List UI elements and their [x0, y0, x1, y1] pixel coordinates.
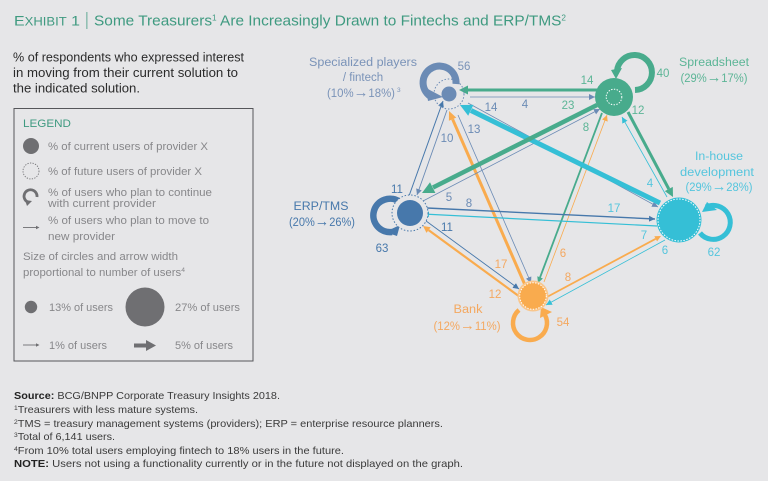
node: spreadsheet — [595, 55, 750, 116]
label: fintech: / fintech — [343, 72, 383, 84]
arrow: spreadsheet to fintech — [459, 75, 597, 94]
footnotes: Treasurers with less mature systems. — [18, 404, 198, 416]
legend: size note: proportional to number of users — [23, 267, 176, 279]
arrow: bank to fintech — [449, 111, 525, 285]
label: ERP/TMS: ERP/TMS — [294, 201, 349, 213]
arrow: in-house to ERP — [423, 203, 657, 226]
footnotes: 3 — [14, 432, 18, 439]
label: fintech: (10%→18%) — [327, 84, 395, 101]
node: ERP/TMS — [289, 195, 428, 255]
title: 2 — [561, 14, 567, 22]
label: fintech: 3 — [397, 87, 401, 94]
arrow: fintech to bank: 13 — [468, 124, 480, 136]
arrow: ERP to bank: 11 — [441, 222, 453, 234]
arrow: ERP to fintech: 11 — [391, 184, 403, 196]
panel: legend — [14, 108, 253, 361]
label: spreadsheet: (29%→17%) — [680, 69, 748, 86]
subtitle text: the indicated solution. — [13, 82, 140, 96]
title: EXHIBIT 1 — [14, 12, 80, 28]
footnotes: Source: BCG/BNPP Corporate Treasury Insights 2018. — [14, 390, 280, 402]
label: spreadsheet: Spreadsheet — [679, 57, 750, 69]
subtitle text: % of respondents who expressed interest — [13, 50, 245, 64]
arrow: fintech to spreadsheet: 4 — [522, 99, 529, 111]
legend: thick arrow: 5% of users — [175, 340, 233, 352]
footnotes: 1 — [14, 405, 18, 412]
arrow: in-house to bank: 7 — [641, 230, 647, 242]
arrow: in-house to bank: 6 — [662, 245, 668, 257]
arrow: bank to in-house — [547, 236, 661, 297]
legend: future users — [23, 163, 203, 179]
arrow: spreadsheet to bank: 8 — [583, 122, 589, 134]
arrow: spreadsheet to ERP: 23 — [562, 100, 574, 112]
arrow: spreadsheet to bank — [537, 113, 602, 283]
arrow: in-house to spreadsheet: 4 — [647, 178, 654, 190]
footnotes: 2 — [14, 419, 18, 426]
arrow: fintech to ERP: 10 — [441, 133, 453, 145]
node: bank: 54 — [557, 317, 570, 329]
subtitle text — [13, 50, 245, 96]
node: ERP/TMS: 63 — [376, 243, 388, 255]
legend: thick arrow — [134, 340, 233, 352]
footnotes: 4 — [14, 446, 18, 453]
node: specialized players / fintech — [309, 57, 470, 109]
label: in-house: In-house — [695, 151, 743, 163]
legend: size note: Size of circles and arrow width — [23, 251, 178, 263]
arrow: spreadsheet to fintech: 14 — [581, 75, 594, 87]
legend: move arrow: % of users who plan to move to — [48, 215, 209, 227]
label: ERP/TMS: (20%→26%) — [289, 213, 355, 230]
arrow: in-house to ERP: 17 — [608, 203, 620, 215]
title — [14, 12, 567, 30]
arrow: spreadsheet to in-house — [628, 105, 673, 197]
footnotes — [14, 390, 463, 470]
footnotes: TMS = treasury management systems (providers); ERP = enterprise resource planners. — [18, 418, 443, 430]
arrow: in-house to bank — [546, 230, 668, 305]
footnotes: Total of 6,141 users. — [18, 431, 115, 443]
label: fintech — [309, 57, 417, 101]
arrow: bank to in-house: 8 — [565, 272, 571, 284]
node: bank — [434, 280, 570, 340]
legend: continue loop: % of users who plan to continue — [48, 187, 212, 199]
label: in-house — [680, 151, 755, 195]
footnotes: From 10% total users employing fintech to 18% users in the future. — [18, 445, 344, 457]
arrow: bank to spreadsheet — [544, 115, 607, 282]
arrow: bank to ERP: 12 — [489, 289, 501, 301]
label: bank: Bank — [454, 304, 483, 316]
arrow: ERP to spreadsheet — [423, 109, 600, 204]
title: 1 — [212, 14, 217, 22]
label: ERP/TMS — [289, 201, 355, 230]
title: Some Treasurers — [94, 12, 209, 30]
label: in-house: (29%→28%) — [686, 178, 753, 195]
node: in-house development — [656, 151, 755, 259]
label: in-house: development — [680, 167, 755, 179]
legend: large circle — [126, 288, 241, 326]
legend: current users — [23, 138, 209, 154]
legend heading: LEGEND — [23, 118, 71, 130]
label: bank: (12%→11%) — [434, 317, 501, 334]
arrow: in-house to spreadsheet — [622, 117, 667, 197]
legend: small circle: 13% of users — [49, 302, 113, 314]
legend: size note: 4 — [181, 267, 185, 274]
arrow: bank to ERP — [423, 226, 520, 301]
legend: continue loop — [24, 187, 212, 210]
node: specialized players / fintech: 56 — [458, 61, 470, 73]
arrow: bank to fintech: 17 — [495, 259, 507, 271]
node: in-house development: 62 — [708, 247, 720, 259]
label: fintech: Specialized players — [309, 57, 417, 69]
label: bank — [434, 304, 501, 334]
legend: future users: % of future users of provider X — [48, 166, 203, 178]
node: spreadsheet: 40 — [657, 68, 669, 80]
legend: move arrow: new provider — [48, 231, 115, 243]
legend: current users: % of current users of provider X — [48, 141, 209, 153]
arrow: fintech to spreadsheet — [470, 97, 595, 111]
arrow: bank to spreadsheet: 6 — [560, 248, 566, 260]
subtitle text: in moving from their current solution to — [13, 66, 238, 80]
arrow: spreadsheet to ERP — [422, 100, 597, 193]
arrow: fintech to in-house: 14 — [485, 102, 498, 114]
arrow: ERP to fintech — [391, 101, 443, 196]
arrow: fintech to ERP — [417, 110, 453, 195]
arrow: in-house to fintech — [460, 105, 660, 203]
legend: size note — [23, 251, 185, 279]
arrow: ERP to spreadsheet: 5 — [446, 192, 452, 204]
footnotes: NOTE: Users not using a functionality currently or in the future not displayed on the graph. — [14, 458, 463, 470]
arrow: fintech to bank — [458, 115, 531, 283]
legend: continue loop: with current provider — [47, 198, 156, 210]
title: Are Increasingly Drawn to Fintechs and ERP/TMS — [217, 12, 561, 30]
legend: move arrow — [23, 215, 209, 243]
arrow: ERP to in-house: 8 — [466, 198, 472, 210]
label: spreadsheet — [679, 57, 750, 86]
arrow: ERP to bank — [422, 218, 519, 289]
arrow: ERP to in-house — [427, 198, 655, 219]
legend: thin arrow — [23, 340, 107, 352]
arrow: fintech to in-house — [468, 102, 658, 207]
legend: thin arrow: 1% of users — [49, 340, 107, 352]
legend: small circle — [25, 301, 113, 314]
legend: large circle: 27% of users — [175, 302, 241, 314]
arrow: spreadsheet to in-house: 12 — [632, 105, 644, 117]
